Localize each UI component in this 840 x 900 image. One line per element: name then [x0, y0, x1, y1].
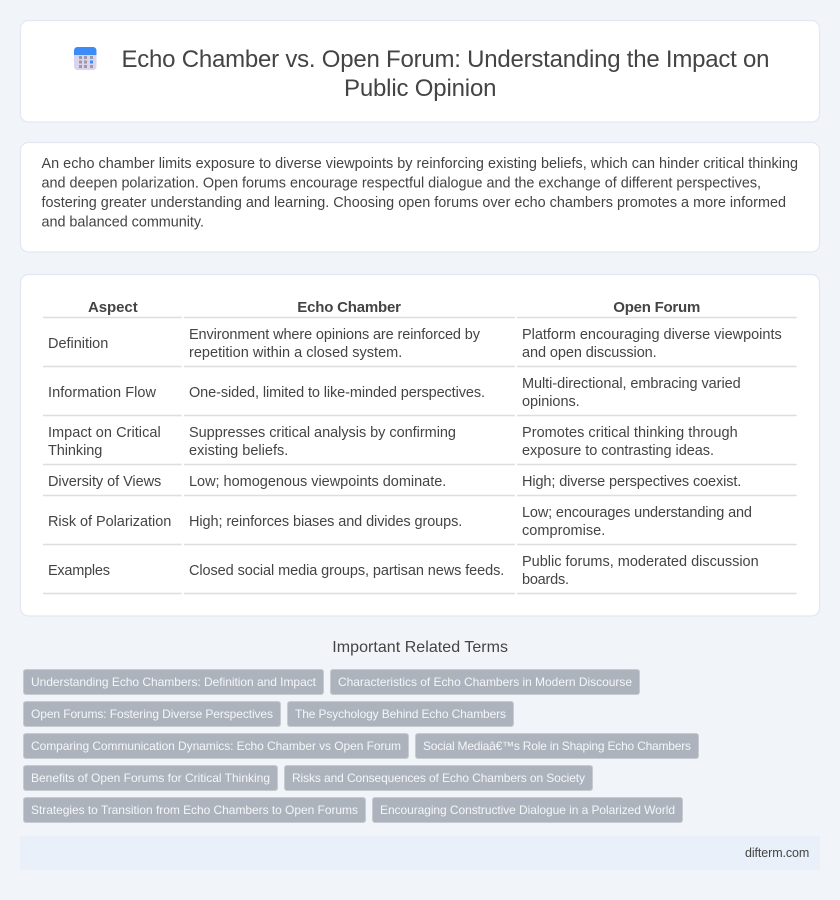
- row: information flow: One-sided, limited to like-minded perspectives.: [189, 385, 485, 401]
- row: definition: and open discussion.: [522, 345, 657, 361]
- table header: Aspect: [88, 299, 138, 316]
- row: impact on critical thinking: Thinking: [48, 443, 102, 459]
- tag: Comparing Communication Dynamics: Echo Chamber vs Open Forum: [31, 739, 401, 753]
- row: diversity of views: High; diverse perspectives coexist.: [522, 474, 741, 490]
- panel: description: [20, 142, 820, 252]
- tag: Risks and Consequences of Echo Chambers on Society: [292, 771, 585, 785]
- row: risk of polarization: Low; encourages understanding and: [522, 505, 752, 521]
- row: risk of polarization: [48, 505, 752, 539]
- row: diversity of views: Low; homogenous viewpoints dominate.: [189, 474, 446, 490]
- tag: [24, 670, 324, 694]
- tag: Characteristics of Echo Chambers in Modern Discourse: [338, 675, 632, 689]
- panel: description: and deepen polarization. Open forums encourage respectful dialogue and the exchange of different perspectives,: [42, 176, 761, 192]
- tag: [24, 734, 408, 758]
- panel: description: and balanced community.: [42, 214, 204, 230]
- panel: comparison table: [20, 274, 820, 616]
- row: diversity of views: [48, 474, 741, 490]
- row: impact on critical thinking: Impact on Critical: [48, 425, 161, 441]
- panel: title card: [20, 20, 820, 122]
- tag: [284, 766, 592, 790]
- row: definition: Environment where opinions are reinforced by: [189, 327, 481, 343]
- panel: related term tags: [24, 670, 698, 822]
- row: impact on critical thinking: [48, 425, 738, 459]
- footer: difterm.com: [745, 846, 809, 860]
- row: risk of polarization: Risk of Polarization: [48, 514, 171, 530]
- row: risk of polarization: High; reinforces biases and divides groups.: [189, 514, 462, 530]
- row: impact on critical thinking: Promotes critical thinking through: [522, 425, 738, 441]
- table header: [88, 299, 700, 316]
- row: impact on critical thinking: existing beliefs.: [189, 443, 288, 459]
- row: information flow: Information Flow: [48, 385, 157, 401]
- tag: [416, 734, 698, 758]
- panel: description: An echo chamber limits exposure to diverse viewpoints by reinforcing existing beliefs, which can hinder critical thinking: [42, 156, 798, 172]
- footer: [20, 836, 820, 870]
- heading: related terms: Important Related Terms: [332, 639, 508, 656]
- title: Public Opinion: [344, 75, 496, 102]
- tag: [24, 702, 280, 726]
- row: examples: Examples: [48, 563, 110, 579]
- row: impact on critical thinking: exposure to contrasting ideas.: [522, 443, 714, 459]
- table header: Echo Chamber: [297, 299, 401, 316]
- tag: Open Forums: Fostering Diverse Perspectives: [31, 707, 273, 721]
- tag: Benefits of Open Forums for Critical Thinking: [31, 771, 270, 785]
- row: definition: Platform encouraging diverse viewpoints: [522, 327, 782, 343]
- tag: Strategies to Transition from Echo Chambers to Open Forums: [31, 803, 358, 817]
- row: examples: Closed social media groups, partisan news feeds.: [189, 563, 504, 579]
- row: definition: Definition: [48, 336, 108, 352]
- title: [122, 46, 770, 102]
- table header: Open Forum: [613, 299, 700, 316]
- row: examples: boards.: [522, 572, 569, 588]
- tag: Social Mediaâ€™s Role in Shaping Echo Chambers: [423, 739, 691, 753]
- row: examples: [48, 554, 759, 588]
- tag: The Psychology Behind Echo Chambers: [295, 707, 506, 721]
- row: definition: [48, 327, 782, 361]
- row: information flow: Multi-directional, embracing varied: [522, 376, 741, 392]
- tag: [24, 798, 366, 822]
- row: information flow: opinions.: [522, 394, 580, 410]
- row: information flow: [48, 376, 741, 410]
- icon: calendar: [74, 47, 96, 70]
- row: diversity of views: Diversity of Views: [48, 474, 161, 490]
- tag: Encouraging Constructive Dialogue in a Polarized World: [380, 803, 675, 817]
- tag: [372, 798, 682, 822]
- tag: [330, 670, 640, 694]
- panel: description: fostering greater understanding and learning. Choosing open forums over echo chambers promotes a more informed: [42, 195, 786, 211]
- tag: [24, 766, 278, 790]
- row: risk of polarization: compromise.: [522, 523, 605, 539]
- row: examples: Public forums, moderated discussion: [522, 554, 759, 570]
- row: impact on critical thinking: Suppresses critical analysis by confirming: [189, 425, 456, 441]
- title: Echo Chamber vs. Open Forum: Understanding the Impact on: [122, 46, 770, 73]
- tag: [288, 702, 514, 726]
- row: definition: repetition within a closed system.: [189, 345, 402, 361]
- tag: Understanding Echo Chambers: Definition and Impact: [31, 675, 317, 689]
